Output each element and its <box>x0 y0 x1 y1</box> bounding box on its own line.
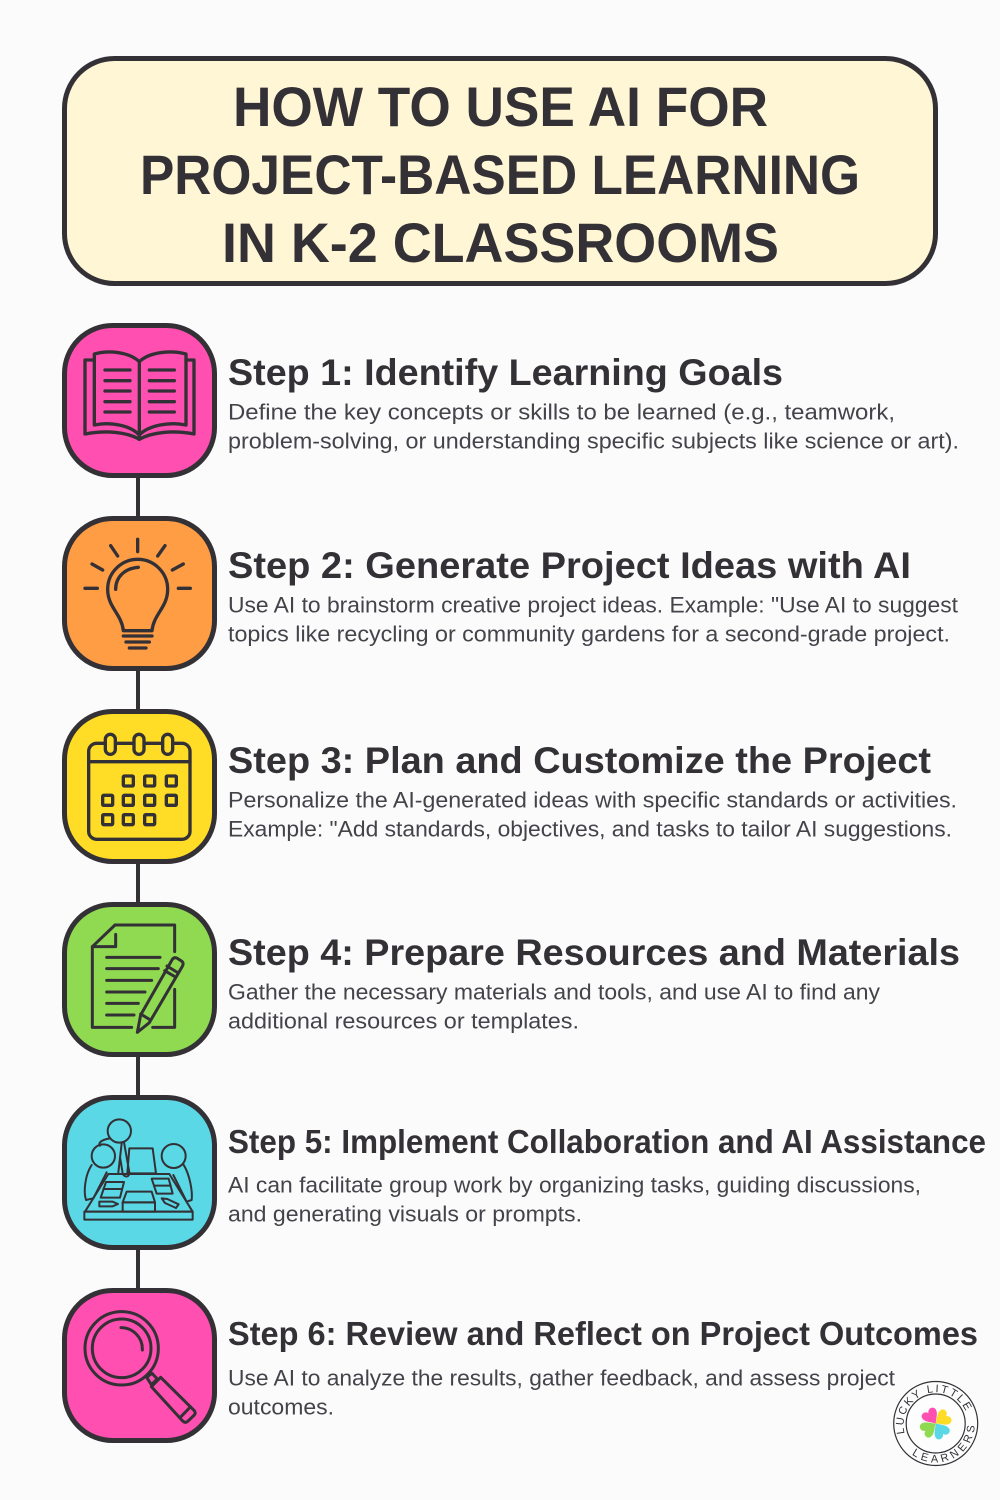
step 3 text: Personalize the AI-generated ideas with specific standards or activities. <box>228 788 957 812</box>
step 1 text: Define the key concepts or skills to be learned (e.g., teamwork, <box>228 400 895 424</box>
step 6 text <box>228 1315 978 1420</box>
title banner <box>64 58 936 284</box>
step 2 icon: light bulb <box>64 518 214 668</box>
step 3 text <box>228 740 957 842</box>
step 5 text <box>228 1123 986 1226</box>
title banner: IN K-2 CLASSROOMS <box>222 211 779 274</box>
step 3 text: Example: "Add standards, objectives, and tasks to tailor AI suggestions. <box>228 816 952 842</box>
step 6 text: Step 6: Review and Reflect on Project Outcomes <box>228 1315 978 1352</box>
step 2 text: Use AI to brainstorm creative project ideas. Example: "Use AI to suggest <box>228 592 958 618</box>
step 4 text: Step 4: Prepare Resources and Materials <box>228 932 960 973</box>
step 5 icon: team around a table <box>64 1098 214 1248</box>
step 6 text: Use AI to analyze the results, gather feedback, and assess project <box>228 1366 895 1390</box>
step 1 text: Step 1: Identify Learning Goals <box>228 352 783 393</box>
step 1 text: problem-solving, or understanding specific subjects like science or art). <box>228 428 959 454</box>
step 2 text <box>228 545 958 646</box>
step 4 text: Gather the necessary materials and tools, and use AI to find any <box>228 980 880 1004</box>
step 5 text: and generating visuals or prompts. <box>228 1202 582 1226</box>
step 4 icon: document and pencil <box>64 904 214 1054</box>
step 6 icon: magnifying glass <box>64 1290 214 1440</box>
step 1 text <box>228 352 959 454</box>
step 2 text: topics like recycling or community gardens for a second-grade project. <box>228 622 950 646</box>
step 3 icon: calendar <box>64 712 214 862</box>
step 1 icon: open book <box>64 326 214 476</box>
step 4 text <box>228 932 960 1034</box>
title banner: HOW TO USE AI FOR <box>233 75 768 138</box>
logo: Lucky Little Learners badge: LEARNERS <box>912 1426 974 1462</box>
step 2 text: Step 2: Generate Project Ideas with AI <box>228 545 911 586</box>
title banner: PROJECT-BASED LEARNING <box>140 143 860 206</box>
step 4 text: additional resources or templates. <box>228 1008 579 1034</box>
step 3 text: Step 3: Plan and Customize the Project <box>228 740 931 781</box>
logo: Lucky Little Learners badge <box>893 1380 978 1466</box>
step 5 text: AI can facilitate group work by organizing tasks, guiding discussions, <box>228 1172 921 1198</box>
logo: Lucky Little Learners badge: LUCKY LITTLE <box>896 1384 972 1434</box>
step 6 text: outcomes. <box>228 1394 334 1420</box>
